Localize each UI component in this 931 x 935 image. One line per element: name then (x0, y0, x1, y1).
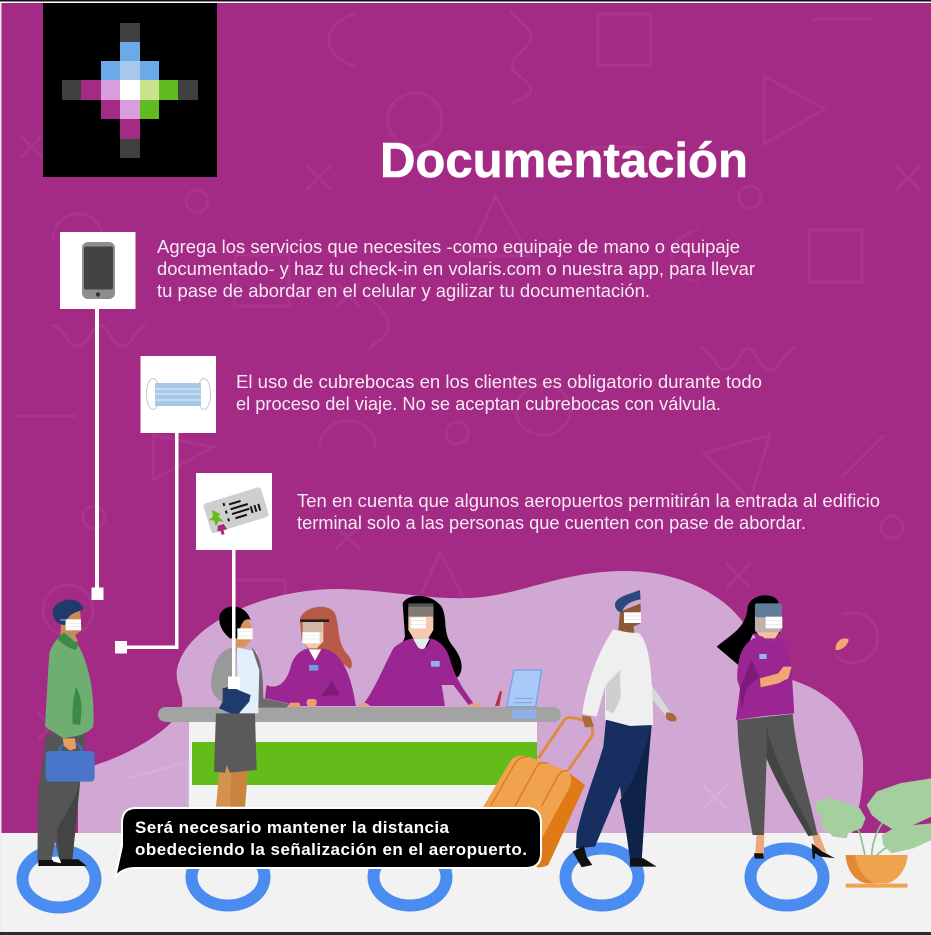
text block: face mask (236, 372, 762, 414)
speech bubble: Será necesario mantener la distancia (135, 818, 450, 837)
logo (43, 3, 217, 177)
speech bubble: obedeciendo la señalización en el aeropuerto. (135, 840, 527, 859)
receptionist centre (357, 596, 483, 706)
man passenger with briefcase (37, 600, 95, 866)
connector: mask (115, 430, 178, 654)
woman passenger at desk (211, 606, 289, 807)
text block: check-in (157, 237, 755, 301)
text block: check-in: documentado- y haz tu check-in en volaris.com o nuestra app, para llevar (157, 259, 755, 279)
text block: terminal access (297, 491, 880, 533)
floor (2, 833, 931, 932)
text block: face mask: El uso de cubrebocas en los clientes es obligatorio durante todo (236, 372, 762, 392)
woman staff right (717, 595, 849, 859)
background lilac blob (78, 571, 863, 833)
connector: phone (92, 305, 104, 600)
text block: check-in: tu pase de abordar en el celular y agilizar tu documentación. (157, 281, 650, 301)
text block: face mask: el proceso del viaje. No se aceptan cubrebocas con válvula. (236, 394, 721, 414)
text block: terminal access: Ten en cuenta que algunos aeropuertos permitirán la entrada al edificio (297, 491, 880, 511)
connector: boarding pass (228, 548, 240, 689)
tablet on desk (495, 670, 542, 707)
man passenger with suitcase (573, 590, 677, 867)
desk (158, 707, 561, 811)
card: boarding pass icon (196, 473, 272, 550)
title: Documentación (380, 134, 748, 188)
speech bubble (115, 808, 541, 878)
text block: check-in: Agrega los servicios que necesites -como equipaje de mano o equipaje (157, 237, 740, 257)
plant (815, 778, 931, 888)
receptionist left (265, 607, 356, 707)
text block: terminal access: terminal solo a las personas que cuenten con pase de abordar. (297, 513, 806, 533)
card: phone icon (60, 232, 136, 309)
distance rings (22, 848, 824, 908)
suitcase (483, 718, 593, 867)
card: face mask icon (140, 356, 216, 433)
